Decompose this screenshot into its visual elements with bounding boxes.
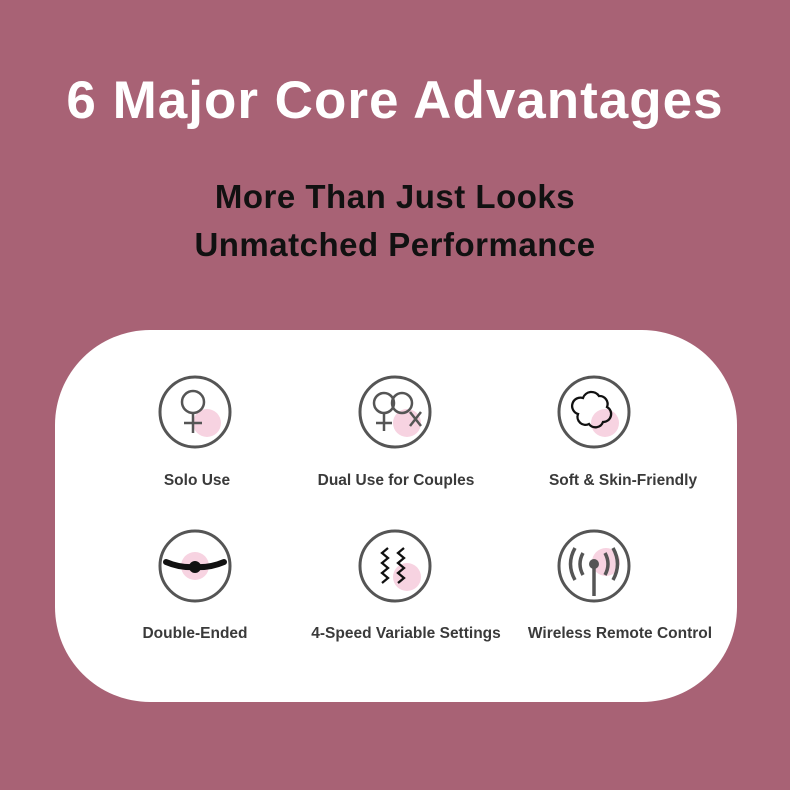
label: double-ended: Double-Ended xyxy=(142,625,248,642)
icon: solo use xyxy=(160,377,230,447)
label: solo use: Solo Use xyxy=(164,472,230,489)
icon: 4-speed xyxy=(360,531,430,601)
subtitle: More Than Just Looks xyxy=(215,178,575,215)
label: wireless: Wireless Remote Control xyxy=(528,625,712,642)
icon: double-ended xyxy=(160,531,230,601)
title: 6 Major Core Advantages xyxy=(66,71,724,130)
label: 4-speed: 4-Speed Variable Settings xyxy=(311,625,501,642)
label: soft: Soft & Skin-Friendly xyxy=(549,472,697,489)
label: dual use: Dual Use for Couples xyxy=(318,472,474,489)
subtitle: Unmatched Performance xyxy=(194,226,596,263)
panel: features card xyxy=(55,330,737,702)
icon: soft cloud xyxy=(559,377,629,447)
subtitle xyxy=(194,178,596,263)
icon: wireless xyxy=(559,531,629,601)
icon: dual use xyxy=(360,377,430,447)
